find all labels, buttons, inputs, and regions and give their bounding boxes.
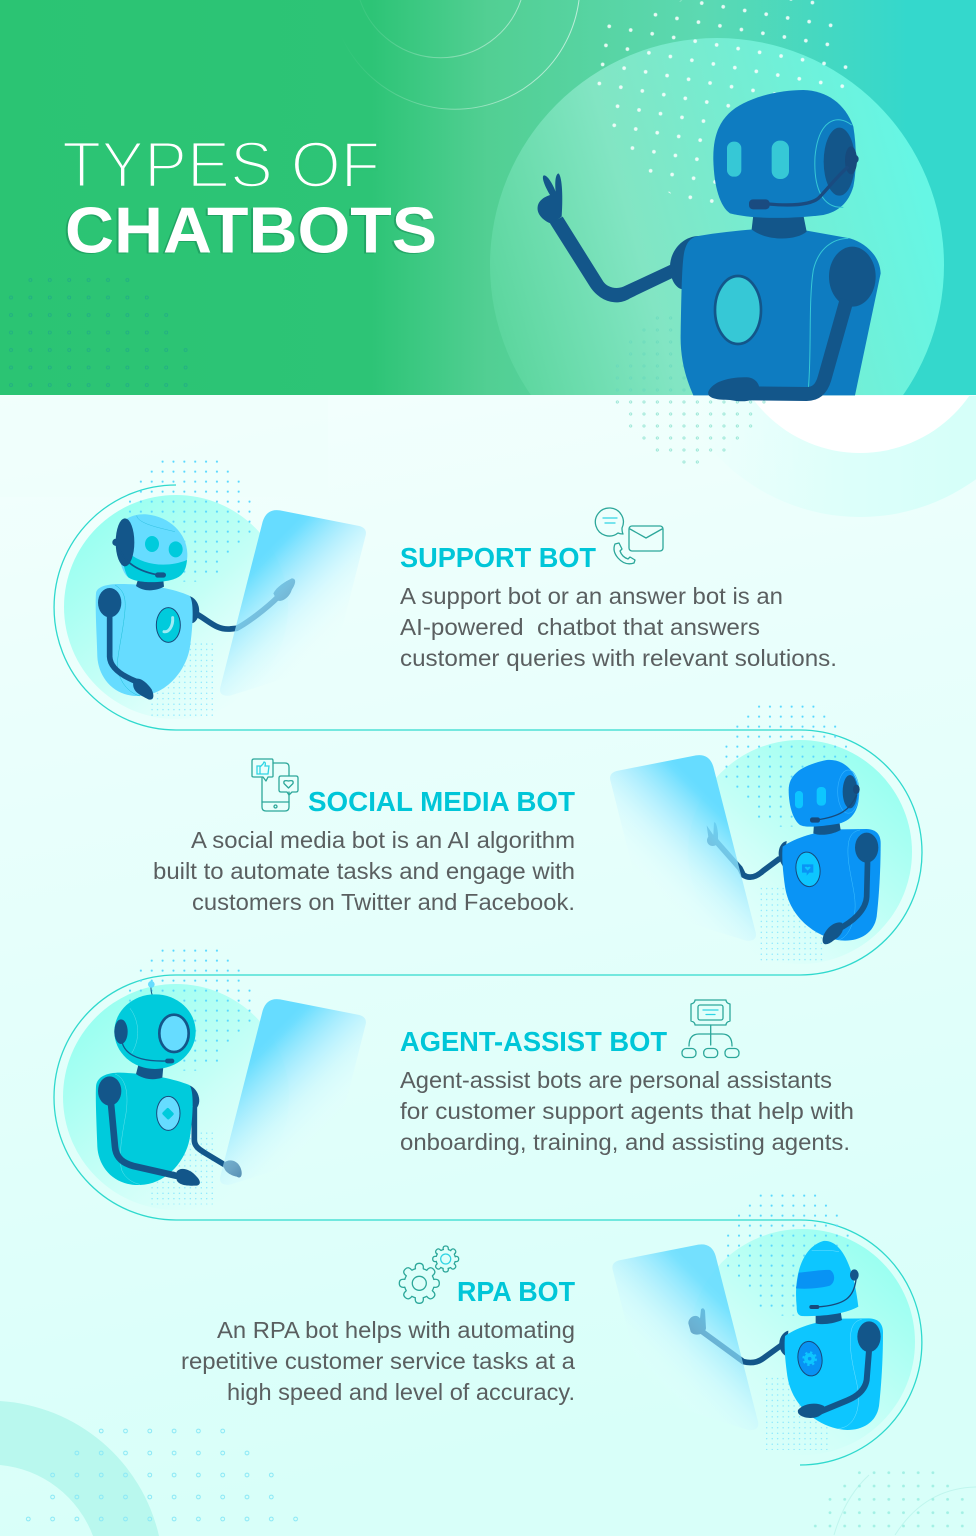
icon: gears: [399, 1246, 459, 1303]
panel: support bot text: [400, 508, 837, 671]
footer ring bottom left: [0, 1401, 159, 1536]
pale rectangle under header: [0, 396, 328, 497]
heading: AGENT-ASSIST BOT: [400, 1026, 667, 1057]
panel: social media bot text: [153, 759, 575, 915]
header banner: [0, 0, 976, 395]
body copy: onboarding, training, and assisting agents.: [400, 1129, 850, 1155]
body copy: Agent-assist bots are personal assistants: [400, 1067, 832, 1093]
body copy: high speed and level of accuracy.: [227, 1379, 575, 1405]
panel: agent-assist bot text: [400, 1000, 854, 1155]
body copy: An RPA bot helps with automating: [217, 1317, 575, 1343]
header thin arcs: [331, 0, 579, 109]
heading: RPA BOT: [457, 1276, 575, 1307]
footer arcs bottom right: [834, 1475, 976, 1535]
tablet: [612, 1244, 758, 1430]
body copy: AI-powered chatbot that answers: [400, 614, 760, 640]
backdrop circle: [689, 1229, 915, 1455]
footer dots bottom left: [16, 1420, 308, 1530]
panel: RPA bot illustration: [612, 1193, 915, 1455]
footer dots bottom right: [808, 1466, 970, 1533]
panel: social media bot illustration: [610, 704, 912, 964]
tablet: [220, 510, 366, 696]
body copy: customer queries with relevant solutions.: [400, 645, 837, 671]
robot: [96, 981, 242, 1186]
panel: agent-assist bot illustration: [63, 948, 366, 1210]
dot grid: [127, 459, 252, 582]
dot grid: [726, 1193, 850, 1316]
header dots left: [1, 271, 195, 394]
body copy: for customer support agents that help with: [400, 1098, 854, 1124]
body copy: [153, 827, 575, 915]
backdrop circle: [64, 495, 288, 719]
body copy: repetitive customer service tasks at a: [181, 1348, 575, 1374]
heading: SOCIAL MEDIA BOT: [308, 786, 575, 817]
header dots lower: [611, 312, 771, 468]
connecting outline: [54, 485, 922, 1465]
icon: phone with likes: [252, 759, 298, 811]
hero white dots: [593, 0, 852, 208]
fine dot grid: [149, 1132, 214, 1204]
body copy: [400, 583, 837, 671]
fine dot grid: [763, 1377, 829, 1450]
body copy: customers on Twitter and Facebook.: [192, 889, 575, 915]
hero body: [681, 229, 881, 401]
robot: [688, 1241, 883, 1430]
icon: bot network: [682, 1000, 739, 1058]
title line 2: CHATBOTS: [65, 194, 437, 266]
panel: support bot illustration: [64, 459, 366, 719]
heading: SUPPORT BOT: [400, 542, 596, 573]
body copy: [181, 1317, 575, 1405]
body copy: built to automate tasks and engage with: [153, 858, 575, 884]
decorative ring under header: [754, 396, 976, 517]
robot: [707, 760, 881, 944]
tablet: [220, 999, 366, 1185]
robot: [96, 514, 295, 700]
fine dot grid: [760, 887, 826, 961]
hero head: [713, 90, 859, 239]
title: [62, 128, 437, 266]
hero robot: [538, 0, 881, 401]
body copy: A support bot or an answer bot is an: [400, 583, 783, 609]
header disc: [490, 38, 944, 395]
body copy: A social media bot is an AI algorithm: [191, 827, 575, 853]
dot grid: [127, 948, 252, 1071]
fine dot grid: [149, 643, 214, 716]
dot grid: [724, 704, 849, 827]
backdrop circle: [688, 740, 912, 964]
icon: chat, mail and phone: [595, 508, 663, 564]
body copy: [400, 1067, 854, 1155]
tablet: [610, 755, 756, 941]
backdrop circle: [63, 984, 289, 1210]
title line 1: TYPES OF: [62, 128, 380, 201]
panel: RPA bot text: [181, 1246, 575, 1405]
hero arm raised: [538, 173, 698, 302]
